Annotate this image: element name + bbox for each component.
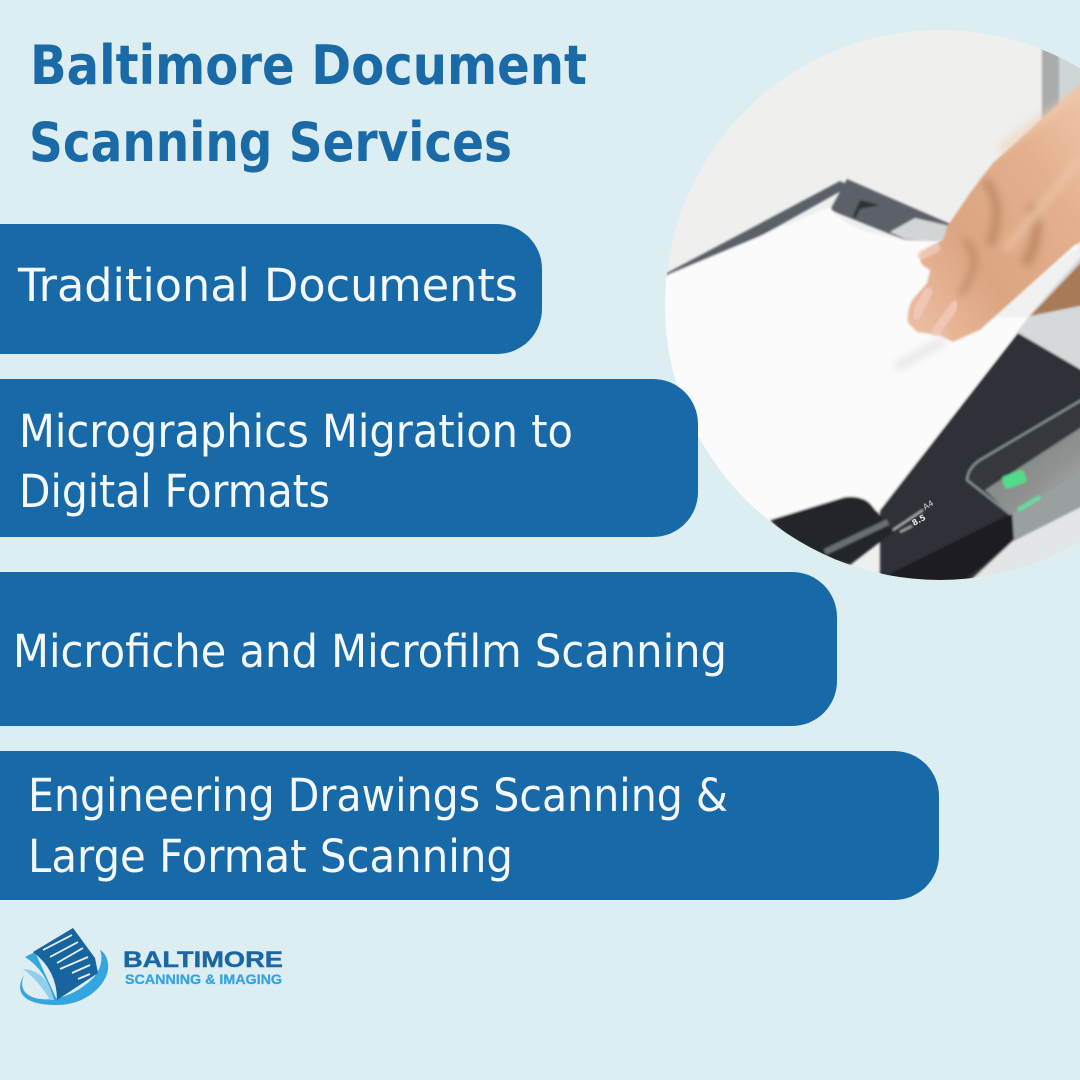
logo: Baltimore Scanning & Imaging <box>20 928 283 1005</box>
logo tagline: SCANNING & IMAGING <box>125 971 282 987</box>
icon: scanned document <box>20 928 108 1005</box>
pill: Microfiche and Microfilm Scanning <box>0 572 837 726</box>
pill: Traditional Documents <box>0 224 542 354</box>
pill: Micrographics Migration <box>0 379 698 537</box>
pill: Micrographics Migration: Micrographics Migration to <box>19 405 573 458</box>
pill: Engineering Drawings <box>0 751 939 900</box>
pill: Engineering Drawings: Engineering Drawings Scanning & <box>28 769 728 822</box>
photo: hand feeding paper into scanner: 8.5 <box>910 513 928 528</box>
logo wordmark: BALTIMORE <box>123 947 283 972</box>
photo: hand feeding paper into scanner: A4 <box>922 499 935 512</box>
title: Baltimore Document <box>30 34 587 97</box>
pill: Traditional Documents: Traditional Documents <box>17 259 518 312</box>
pill: Microfiche and Microfilm Scanning: Microfiche and Microfilm Scanning <box>13 625 727 678</box>
pill: Engineering Drawings: Large Format Scanning <box>28 830 513 883</box>
title <box>29 34 587 174</box>
title: Scanning Services <box>29 111 512 174</box>
photo: hand feeding paper into scanner <box>660 25 1080 600</box>
pill: Micrographics Migration: Digital Formats <box>19 465 330 518</box>
